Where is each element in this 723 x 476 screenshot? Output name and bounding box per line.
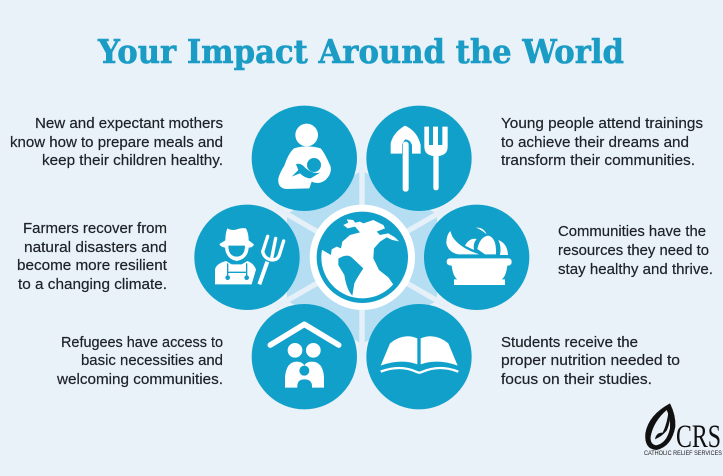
text block: young people: transform their communities.: [501, 152, 695, 169]
text block: young people: to achieve their dreams and: [501, 134, 689, 151]
text block: farmers: become more resilient: [17, 257, 168, 274]
text block: communities: [558, 223, 713, 278]
text block: students: Students receive the: [501, 334, 638, 351]
text block: mothers: know how to prepare meals and: [10, 134, 223, 151]
center globe: [310, 205, 415, 310]
text block: communities: Communities have the: [558, 223, 706, 240]
text block: students: [501, 334, 680, 388]
text block: refugees: Refugees have access to: [61, 334, 223, 351]
circle icon: farmer with pitchfork: [194, 205, 300, 310]
text block: refugees: basic necessities and: [81, 352, 223, 369]
circle icon: fruit bowl: [424, 205, 529, 310]
text block: young people: Young people attend trainings: [501, 115, 703, 132]
text block: mothers: New and expectant mothers: [35, 115, 223, 132]
logo: Catholic Relief Services: [644, 403, 723, 457]
text block: mothers: keep their children healthy.: [42, 152, 223, 169]
central diagram: [194, 106, 529, 409]
text block: communities: resources they need to: [558, 242, 709, 259]
logo mark: flame: [645, 403, 675, 450]
text block: farmers: Farmers recover from: [23, 220, 167, 237]
text block: refugees: welcoming communities.: [56, 371, 223, 388]
circle icon: shovel and fork: [366, 106, 472, 211]
circle icon: family under roof: [252, 304, 357, 409]
text block: farmers: natural disasters and: [24, 239, 167, 256]
text block: students: proper nutrition needed to: [501, 352, 680, 369]
text block: young people: [501, 115, 703, 169]
text block: communities: stay healthy and thrive.: [558, 261, 713, 278]
text block: farmers: to a changing climate.: [18, 276, 167, 293]
circle icon: open book: [366, 304, 472, 409]
text block: mothers: [10, 115, 223, 169]
text block: farmers: [17, 220, 168, 293]
circle icon: mother and baby: [252, 106, 357, 211]
light blue hexagon with spokes: [276, 158, 448, 356]
title: Your Impact Around the World: [97, 32, 624, 71]
text block: students: focus on their studies.: [501, 371, 652, 388]
text block: refugees: [56, 334, 223, 388]
